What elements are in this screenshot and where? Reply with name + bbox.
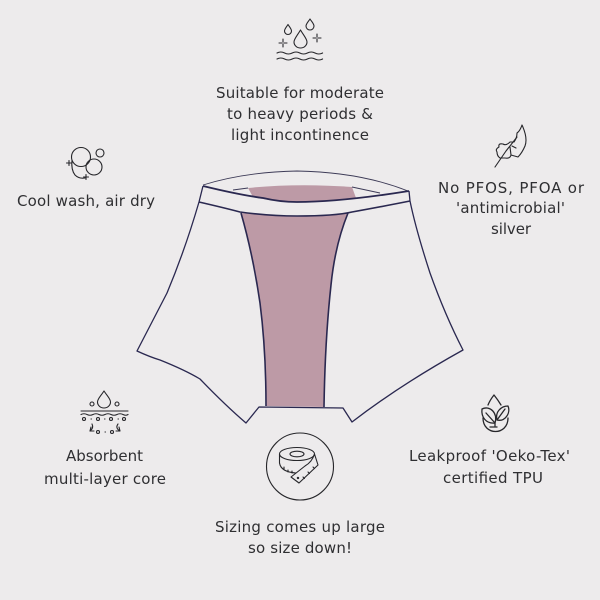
- text: leakproof layer: [409, 447, 570, 487]
- text: absorbency: Suitable for moderate: [216, 84, 384, 102]
- text: absorbency: to heavy periods &: [227, 105, 373, 123]
- text: absorbency: [216, 84, 384, 144]
- text: materials: silver: [491, 220, 532, 238]
- inner back gusset panel: [248, 185, 356, 202]
- text: materials: 'antimicrobial': [456, 199, 565, 217]
- text: materials: No PFOS, PFOA or: [438, 179, 585, 197]
- icon: measuring tape in circle: [266, 433, 334, 500]
- gusset seams: [241, 213, 348, 407]
- text: core: [44, 447, 166, 488]
- text: materials: [438, 179, 585, 238]
- icon: bubbles: [66, 148, 104, 180]
- icon: absorbent layers: [81, 391, 128, 434]
- icon: leaves in drop: [482, 395, 509, 432]
- body outline: [137, 186, 463, 423]
- text: wash instructions: Cool wash, air dry: [17, 192, 155, 210]
- text: sizing advice: Sizing comes up large: [215, 518, 385, 536]
- text: leakproof layer: certified TPU: [443, 469, 543, 487]
- front gusset panel: [241, 213, 348, 407]
- text: leakproof layer: Leakproof 'Oeko-Tex': [409, 447, 570, 465]
- front waistband lines: [203, 186, 409, 202]
- icon: water drops and waves: [277, 19, 323, 60]
- text: core: multi-layer core: [44, 470, 166, 488]
- garment illustration: briefs: [137, 171, 463, 423]
- back waistband outline: [203, 171, 408, 193]
- text: sizing advice: so size down!: [248, 539, 352, 557]
- text: sizing advice: [215, 518, 385, 557]
- icon: feather: [495, 125, 526, 167]
- text: absorbency: light incontinence: [231, 126, 369, 144]
- text: core: Absorbent: [66, 447, 143, 465]
